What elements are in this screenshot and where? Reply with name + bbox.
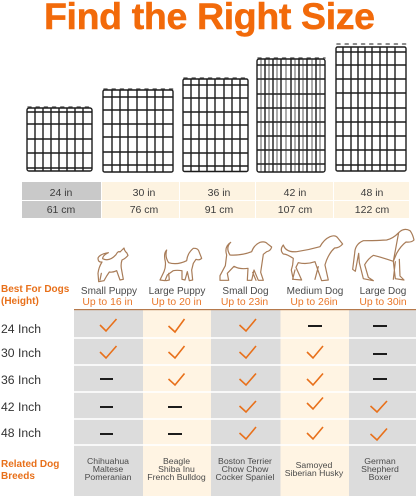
dog size labels: Up to 16 in (82, 297, 133, 308)
row: 48 inch marks (100, 427, 387, 440)
row: 30 inch marks (100, 346, 387, 358)
panel: 36 inch pen (183, 78, 248, 172)
size table: 24 in (50, 187, 73, 199)
dog size labels: Small Puppy (81, 286, 137, 297)
breeds text (85, 456, 399, 482)
breeds text: French Bulldog (147, 472, 206, 482)
icon: small dog (220, 242, 272, 280)
dog size labels (81, 286, 407, 308)
breeds text: Boston Terrier (218, 456, 272, 466)
size table: 76 cm (130, 204, 159, 216)
heading: related dog breeds: Breeds (1, 471, 35, 482)
size table: 30 in (133, 187, 156, 199)
dog size labels: Up to 26in (290, 297, 338, 308)
dog size labels: Up to 20 in (151, 297, 202, 308)
dog size labels: Up to 23in (221, 297, 268, 308)
size table: 48 in (361, 187, 384, 199)
row labels (1, 322, 41, 440)
row: 36 inch marks (100, 374, 387, 385)
breeds text: Shiba Inu (158, 464, 195, 474)
heading: best for dogs (1, 284, 70, 307)
breeds text: Samoyed (296, 460, 333, 470)
size table: 107 cm (278, 204, 312, 216)
size table: 122 cm (355, 204, 389, 216)
breeds text: Shepherd (361, 464, 399, 474)
size table (22, 182, 409, 218)
heading: related dog breeds: Related Dog (1, 459, 59, 470)
row: 42 inch marks (100, 398, 387, 412)
breeds text: Boxer (369, 472, 391, 482)
icon: large puppy (160, 248, 202, 281)
comparison table background (74, 309, 416, 496)
breeds text: Chow Chow (222, 464, 269, 474)
heading: best for dogs: (Height) (1, 296, 39, 307)
heading: related dog breeds (1, 459, 59, 482)
breeds text: Beagle (163, 456, 190, 466)
row labels: 24 Inch (1, 322, 41, 336)
breeds text: Chihuahua (87, 456, 129, 466)
panel: 24 inch pen (27, 107, 92, 171)
row labels: 36 Inch (1, 373, 41, 387)
size table: 42 in (284, 187, 307, 199)
breeds text: German (364, 456, 396, 466)
dog size labels: Small Dog (222, 286, 269, 297)
breeds text: Pomeranian (85, 472, 132, 482)
breeds text: Cocker Spaniel (216, 472, 275, 482)
dog size labels: Up to 30in (359, 297, 407, 308)
breeds text: Maltese (93, 464, 123, 474)
size table: 36 in (208, 187, 231, 199)
row labels: 30 Inch (1, 346, 41, 360)
row labels: 42 Inch (1, 400, 41, 414)
size table: 91 cm (205, 204, 234, 216)
icon: large dog (353, 229, 414, 281)
dog size labels: Medium Dog (287, 286, 343, 297)
heading: best for dogs: Best For Dogs (1, 284, 70, 295)
breeds text: Siberian Husky (285, 468, 344, 478)
row: 24 inch marks (100, 319, 387, 332)
size table: 61 cm (47, 204, 76, 216)
row labels: 48 Inch (1, 426, 41, 440)
panel: 42 inch pen (257, 58, 325, 172)
panel: 30 inch pen (103, 89, 173, 172)
dog size labels: Large Puppy (149, 286, 205, 297)
dog size labels: Large Dog (360, 286, 406, 297)
icon: small puppy (98, 248, 128, 282)
panel: 48 inch pen (336, 44, 406, 171)
icon: medium dog (281, 236, 343, 281)
